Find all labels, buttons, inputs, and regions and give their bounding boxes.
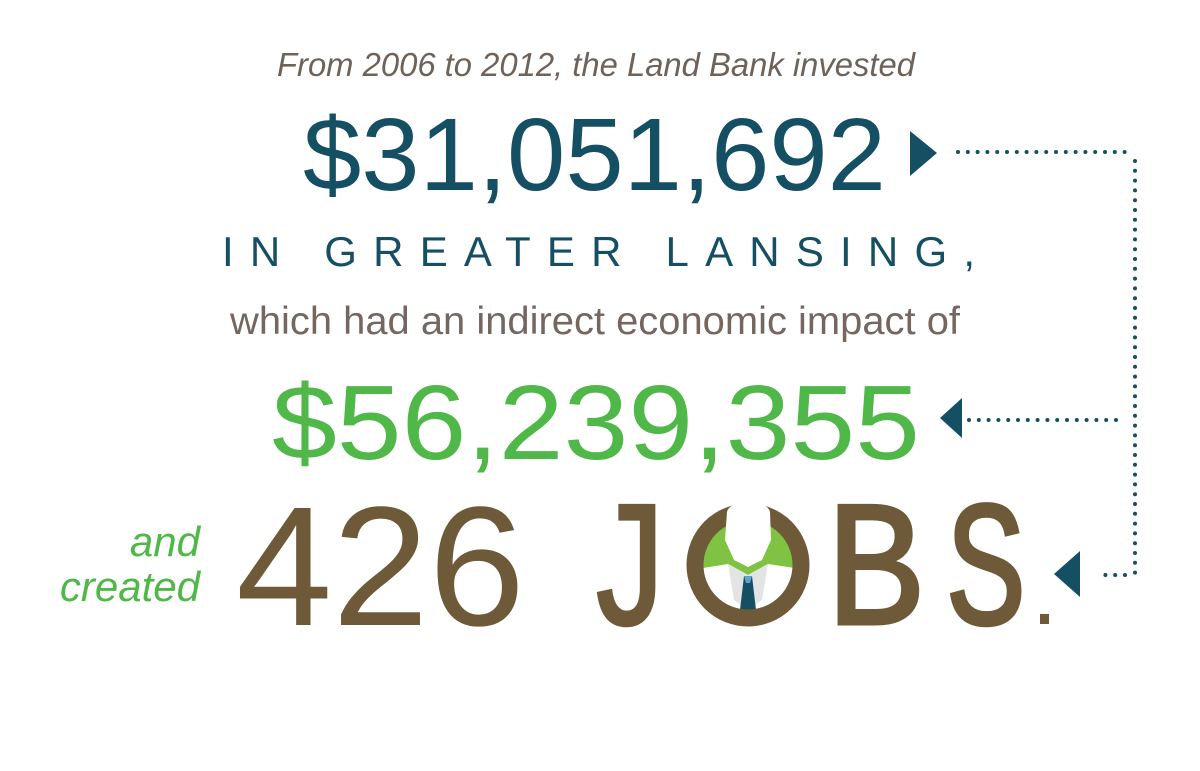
JOBS word: B (826, 475, 924, 679)
location heading: IN GREATER LANSING, (222, 228, 975, 275)
JOBS word: J (586, 475, 671, 679)
dotted connector (958, 152, 1135, 575)
JOBS word (596, 502, 1022, 628)
intro text: From 2006 to 2012, the Land Bank invested (277, 46, 917, 83)
impact text: which had an indirect economic impact of (229, 300, 960, 343)
period (1040, 614, 1049, 624)
icon: person in O (690, 502, 810, 630)
and created label: and (130, 518, 202, 565)
and created label: created (60, 563, 202, 610)
invested amount: $31,051,692 (303, 97, 886, 212)
arrow: right to dotted connector (910, 131, 937, 176)
impact amount: $56,239,355 (272, 364, 920, 482)
and created label (60, 518, 202, 610)
arrow: left into jobs (1054, 551, 1080, 597)
arrow: left into impact (940, 398, 962, 438)
JOBS word: S (946, 475, 1027, 679)
jobs number: 426 (236, 472, 525, 662)
